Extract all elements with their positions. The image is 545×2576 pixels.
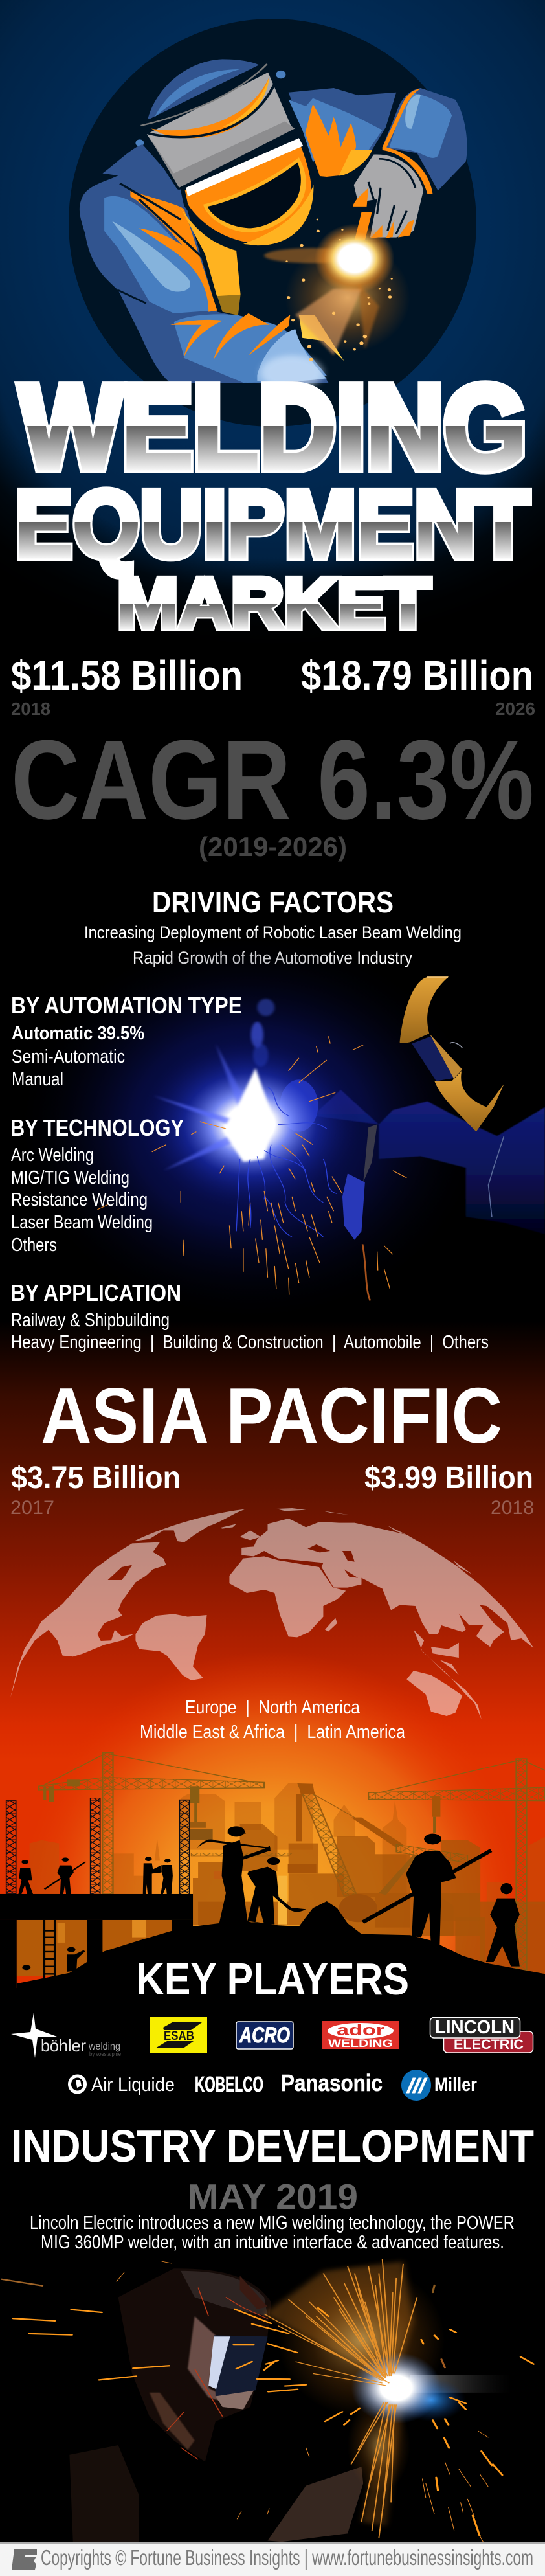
black steel towers bbox=[6, 1798, 190, 1895]
arc glow bbox=[264, 2261, 466, 2526]
regional value 2017 bbox=[10, 1461, 181, 1519]
segments: by technology: Resistance Welding bbox=[11, 1190, 148, 1210]
construction skyline scene bbox=[0, 1753, 545, 2044]
segments: by automation type: Semi-Automatic bbox=[12, 1046, 125, 1067]
sleeve shadow bbox=[69, 2445, 139, 2542]
segments: by application: Railway & Shipbuilding bbox=[11, 1310, 170, 1331]
driving factors: DRIVING FACTORS bbox=[152, 885, 394, 919]
logo: Kobelco: KOBELCO bbox=[195, 2072, 263, 2096]
welding spark burst bbox=[261, 219, 410, 390]
logo: Lincoln Electric: LINCOLN bbox=[435, 2017, 515, 2038]
title line: market: MARKET bbox=[117, 564, 430, 644]
logo: Miller bbox=[401, 2070, 477, 2101]
tower crane left bbox=[38, 1753, 264, 1894]
segments: by application bbox=[10, 1280, 489, 1353]
logo: ador welding bbox=[322, 2021, 399, 2050]
bright flying sparks bbox=[2, 2279, 533, 2536]
illustration: cartoon welder in dark circle bbox=[69, 19, 476, 427]
tower crane right bbox=[368, 1759, 545, 1972]
footer bar bbox=[0, 2542, 545, 2576]
regional value 2018 bbox=[364, 1461, 534, 1519]
regional value 2017: $3.75 Billion bbox=[11, 1461, 181, 1495]
regional value 2018: 2018 bbox=[491, 1497, 534, 1519]
arc flash bbox=[139, 1038, 361, 1211]
segments: by technology bbox=[10, 1114, 184, 1256]
heading: key players: KEY PLAYERS bbox=[136, 1954, 409, 2004]
segments: by technology: Laser Beam Welding bbox=[11, 1212, 153, 1233]
segments: by technology: Arc Welding bbox=[11, 1145, 94, 1166]
photo: welder with orange sparks bbox=[2, 2259, 533, 2542]
regional value 2018: $3.99 Billion bbox=[364, 1461, 533, 1495]
market value 2018: 2018 bbox=[11, 699, 50, 719]
background buildings bbox=[17, 1783, 545, 1976]
segments: by technology: MIG/TIG Welding bbox=[11, 1168, 129, 1188]
arc smoke bbox=[251, 999, 274, 1067]
regional value 2017: 2017 bbox=[10, 1497, 54, 1519]
segments: by automation type: Automatic 39.5% bbox=[12, 1023, 144, 1044]
gloved hand bbox=[267, 2467, 363, 2542]
logo: bohler welding: welding bbox=[88, 2041, 120, 2052]
segments: by technology: BY TECHNOLOGY bbox=[10, 1114, 184, 1141]
other regions list: Middle East & Africa | Latin America bbox=[140, 1722, 406, 1743]
region heading: Asia Pacific: ASIA PACIFIC bbox=[41, 1372, 502, 1460]
title line: market: MARKET bbox=[117, 564, 430, 644]
market value 2018 bbox=[11, 652, 243, 719]
driving factors bbox=[84, 885, 462, 967]
welding helmet bbox=[140, 64, 314, 245]
ladder bbox=[44, 1920, 55, 1980]
segments: by technology: Others bbox=[11, 1235, 57, 1256]
mobile crane bbox=[191, 1783, 467, 1922]
blue sparks bbox=[236, 1087, 337, 1237]
welding helmet bbox=[400, 976, 504, 1132]
logo: bohler welding: böhler bbox=[41, 2036, 86, 2055]
logo: Air Liquide: Air Liquide bbox=[91, 2074, 175, 2096]
photo: welder with blue arc bbox=[14, 931, 545, 1324]
right arm bbox=[289, 88, 467, 240]
driving factors: Increasing Deployment of Robotic Laser Beam Welding bbox=[84, 923, 462, 942]
segments: by automation type bbox=[11, 992, 242, 1090]
logo: ador welding: WELDING bbox=[328, 2037, 393, 2050]
logo: Panasonic: Panasonic bbox=[281, 2070, 383, 2096]
world map globe bbox=[10, 1508, 533, 1719]
thin lower sparks bbox=[117, 2261, 488, 2542]
logo: ACRO: ACRO bbox=[239, 2023, 290, 2048]
market value 2018: $11.58 Billion bbox=[11, 652, 243, 699]
metal rod bbox=[410, 2375, 511, 2393]
market value 2026 bbox=[301, 652, 535, 719]
other regions list: Europe | North America bbox=[185, 1697, 361, 1718]
footer logo bbox=[12, 2549, 37, 2570]
workers silhouettes bbox=[18, 1826, 520, 1972]
logo: ESAB bbox=[150, 2017, 207, 2053]
building platform and hill bbox=[0, 1894, 545, 2044]
welding helmet bbox=[118, 2268, 271, 2462]
logo: Miller: Miller bbox=[434, 2074, 477, 2096]
zipper line bbox=[488, 1136, 504, 1217]
development description bbox=[30, 2213, 515, 2253]
logo: ador welding: ador bbox=[337, 2022, 384, 2039]
date: May 2019: MAY 2019 bbox=[188, 2176, 358, 2217]
welder jacket bbox=[313, 1090, 545, 1234]
segments: by automation type: Manual bbox=[12, 1069, 63, 1090]
welder body bbox=[80, 144, 344, 383]
logo: bohler welding: by voestalpine bbox=[89, 2051, 121, 2057]
logo: ESAB: ESAB bbox=[164, 2029, 194, 2043]
title: Welding Equipment Market bbox=[15, 361, 529, 644]
radial orange sparks bbox=[264, 2259, 417, 2538]
logo: bohler welding bbox=[11, 2013, 121, 2058]
CAGR: (2019-2026) bbox=[199, 831, 347, 862]
gloved hands bbox=[280, 1079, 377, 1240]
segments: by application: BY APPLICATION bbox=[10, 1280, 181, 1306]
orange sparks bbox=[97, 1036, 406, 1300]
other regions list bbox=[140, 1697, 406, 1743]
market value 2026: 2026 bbox=[495, 699, 535, 719]
back of hood bbox=[135, 59, 285, 146]
logo: Lincoln Electric bbox=[430, 2017, 533, 2053]
driving factors: Rapid Growth of the Automotive Industry bbox=[133, 948, 412, 967]
segments: by automation type: BY AUTOMATION TYPE bbox=[11, 992, 242, 1019]
logo: Lincoln Electric: ELECTRIC bbox=[454, 2037, 524, 2052]
